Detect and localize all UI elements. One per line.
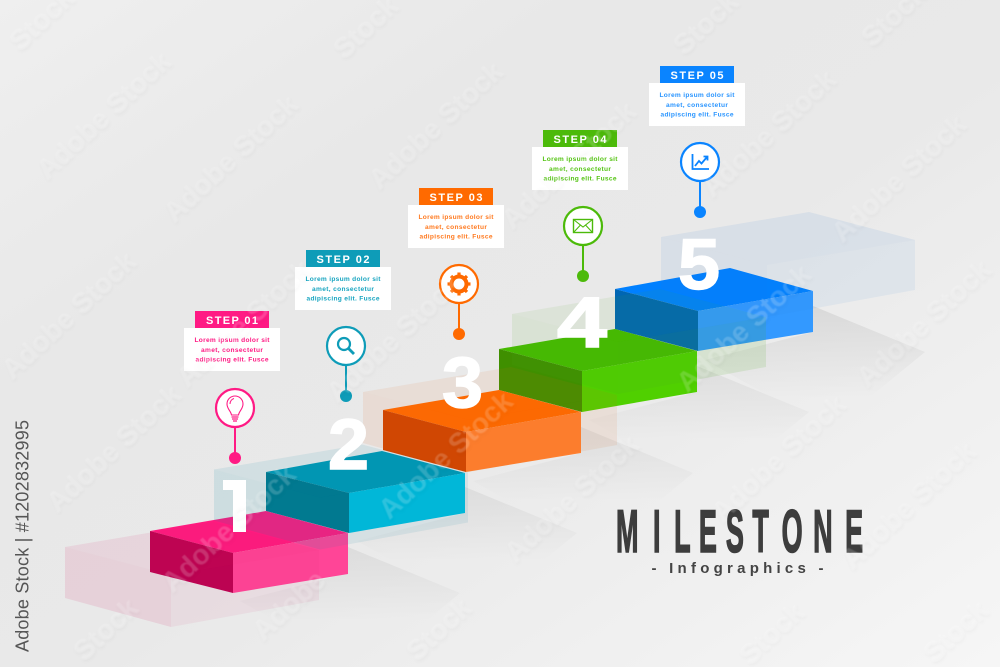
watermarks: Adobe Stock [705,388,852,528]
step 2 label: adipiscing elit. Fusce [306,296,380,302]
step 2 label [295,250,391,310]
step shadows [240,306,925,667]
watermarks: Stock [917,593,994,667]
watermarks: Adobe Stock [170,253,317,393]
step 5 block [615,268,813,351]
watermarks: Adobe Stock [695,63,842,203]
watermarks: Stock [67,591,144,666]
title: milestone: MILESTONE [616,498,863,565]
step 3 label: adipiscing elit. Fusce [420,234,493,240]
step 3 label [408,188,504,248]
subtitle: - Infographics - [652,560,824,577]
watermarks: Adobe Stock [495,95,642,235]
number 2: 2 [328,406,369,485]
step 2 label: Lorem ipsum dolor sit [306,276,381,283]
watermarks: Adobe Stock [157,88,304,228]
step 3 label: Lorem ipsum dolor sit [418,214,494,221]
ghost block 1 [65,522,319,627]
watermarks: Adobe Stock [498,428,645,568]
step 4 block [499,329,697,412]
step 1 label: STEP 01 [206,315,258,327]
pin: gear icon [440,265,478,340]
step 3 label: STEP 03 [430,192,482,204]
ghost block 5 [661,212,915,317]
watermarks: Adobe Stock [372,385,519,525]
step 3 block [383,390,581,472]
ghost block 3 [363,367,617,472]
stock id caption: Adobe Stock | #1202832995 [12,420,32,652]
watermarks: Adobe Stock [850,253,997,393]
ghost block 4 [512,289,766,394]
step 1 label: Lorem ipsum dolor sit [194,337,270,344]
step 2 label: amet, consectetur [312,286,374,293]
step 5 label: STEP 05 [670,70,724,82]
step 5 label: adipiscing elit. Fusce [660,112,734,118]
step 5 label: Lorem ipsum dolor sit [660,92,735,99]
watermarks: Adobe Stock [40,378,187,518]
number 1: 1 [221,465,254,561]
step 3 label: amet, consectetur [425,224,487,231]
pin: magnifier icon [327,327,365,402]
step 1 label: amet, consectetur [201,347,263,354]
step 1 label: adipiscing elit. Fusce [196,356,269,364]
pin: lightbulb icon [216,389,254,464]
number 3: 3 [442,344,483,423]
step 4 label [532,130,628,190]
step 4 label: amet, consectetur [549,166,611,173]
watermarks: Adobe Stock [835,435,982,575]
step 2 block [266,451,465,533]
step 1 block [150,511,348,593]
step 4 label: adipiscing elit. Fusce [544,176,617,182]
watermarks: Adobe Stock [155,458,302,598]
step 5 label: amet, consectetur [666,102,728,109]
number 1 [223,480,246,532]
watermarks: Adobe [246,564,331,646]
watermarks: Adobe Stock [825,108,972,248]
pin: growth chart icon [681,143,719,218]
step 4 label: STEP 04 [554,134,607,146]
watermarks: Stock [400,591,477,666]
step 2 label: STEP 02 [316,254,370,266]
number 4: 4 [557,284,608,363]
watermarks: Adobe Stock [362,55,509,195]
number 5: 5 [678,226,720,305]
step 5 label [649,66,745,126]
pin: envelope icon [564,207,602,282]
watermarks: Adobe Stock [670,258,817,398]
watermarks: Adobe Stock [320,268,467,408]
ghost block 2 [214,444,468,550]
watermarks: Adobe Stock [30,45,177,185]
step 4 label: Lorem ipsum dolor sit [542,156,618,163]
step 1 label [184,311,280,371]
